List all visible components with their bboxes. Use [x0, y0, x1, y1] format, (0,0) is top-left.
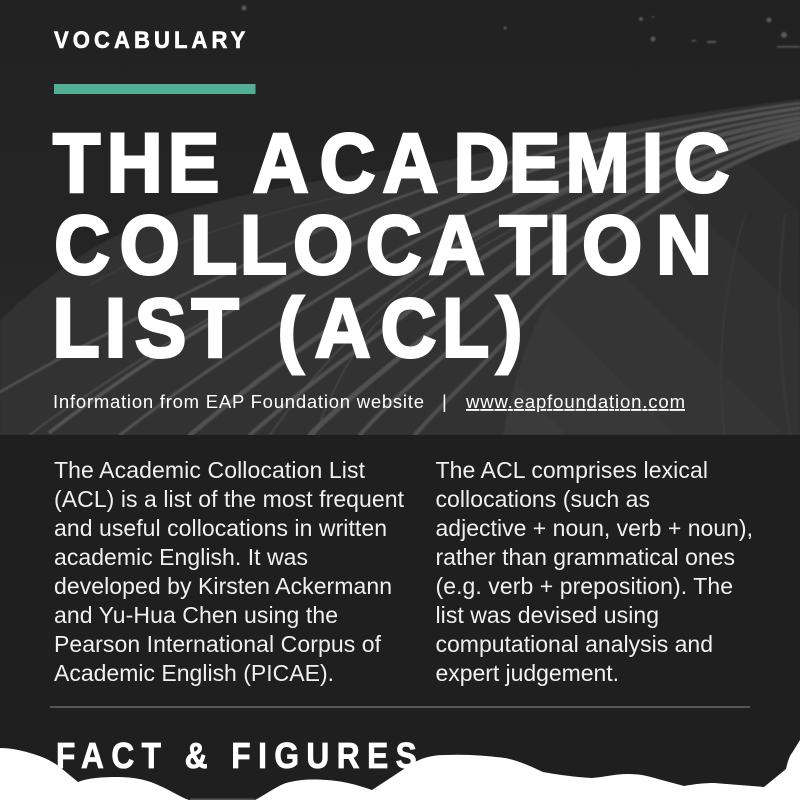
torn paper edge [0, 740, 800, 800]
text block: ACL composition: adjective + noun, verb + noun), [436, 515, 753, 541]
source line [53, 391, 685, 412]
notch in torn edge [190, 798, 255, 800]
source line: | [442, 391, 447, 412]
panel: lower text background [0, 435, 800, 800]
source line: www.eapfoundation.com [465, 391, 685, 412]
text block: ACL definition: developed by Kirsten Ackermann [54, 573, 392, 599]
text block: ACL composition: The ACL comprises lexical [436, 457, 708, 483]
text block: ACL composition [436, 457, 753, 686]
text block: ACL composition: expert judgement. [436, 660, 619, 686]
title: LIST (ACL) [53, 282, 522, 375]
accent bar [54, 84, 256, 94]
heading: fact and figures: FACT & FIGURES [56, 736, 417, 776]
title: COLLOCATION [54, 199, 712, 292]
text block: ACL definition: Pearson International Corpus of [54, 631, 382, 657]
text block: ACL definition: Academic English (PICAE). [54, 660, 334, 686]
title: THE ACADEMIC [53, 117, 730, 210]
text block: ACL composition: (e.g. verb + preposition). The [436, 573, 733, 599]
text block: ACL definition: academic English. It was [54, 544, 308, 570]
text block: ACL definition: and Yu-Hua Chen using the [54, 602, 338, 628]
source line: Information from EAP Foundation website [53, 391, 424, 412]
label: Vocabulary: VOCABULARY [54, 26, 245, 53]
text block: ACL composition: rather than grammatical ones [436, 544, 735, 570]
text block: ACL definition: and useful collocations in written [54, 515, 387, 541]
text block: ACL definition [54, 457, 405, 686]
text block: ACL composition: list was devised using [436, 602, 659, 628]
panel: hero background with night road photo [0, 0, 800, 435]
title [53, 117, 730, 375]
text block: ACL composition: computational analysis and [436, 631, 713, 657]
text block: ACL definition: The Academic Collocation List [54, 457, 366, 483]
text block: ACL composition: collocations (such as [436, 486, 650, 512]
text block: ACL definition: (ACL) is a list of the most frequent [54, 486, 405, 512]
